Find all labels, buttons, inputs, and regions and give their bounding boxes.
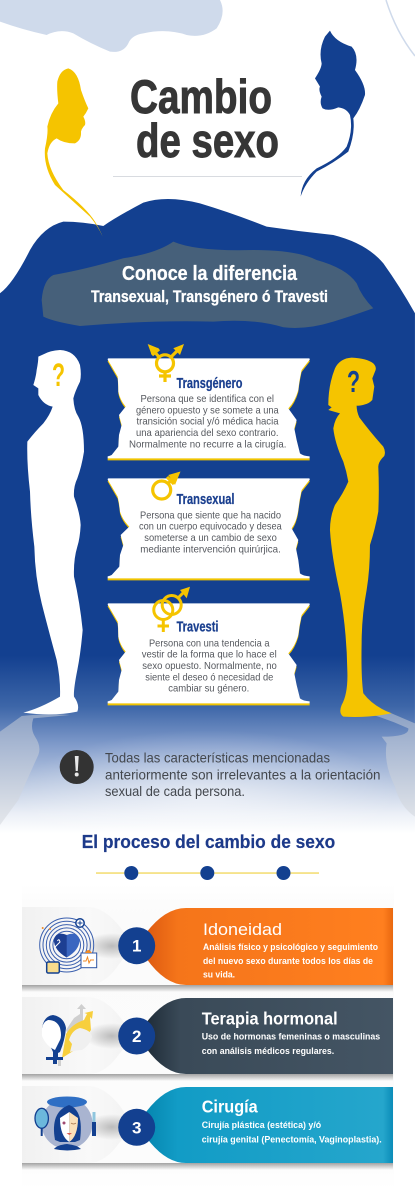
number badge: 3 (132, 1118, 141, 1137)
left tab (22, 907, 140, 985)
title: de sexo (136, 114, 279, 167)
description: una apariencia del sexo contrario. (136, 428, 278, 439)
card: Travesti (108, 587, 310, 705)
icon: face with mirror (35, 1096, 96, 1150)
woman silhouette: ? (347, 364, 360, 399)
card shape (108, 478, 310, 580)
heading: Travesti (176, 619, 218, 636)
card: Transexual (108, 472, 310, 580)
step 1: Idoneidad (22, 907, 393, 992)
step text (203, 920, 378, 981)
description (142, 638, 277, 695)
step text: Cirujía plástica (estética) y/ó (202, 1120, 321, 1131)
number badge: 2 (132, 1027, 141, 1046)
shadow (22, 1163, 393, 1170)
step text: Idoneidad (203, 920, 282, 939)
step text: Terapia hormonal (202, 1008, 338, 1028)
number badge (118, 1109, 155, 1146)
step text (202, 1097, 382, 1146)
alert note (105, 750, 380, 799)
colour bar (146, 908, 393, 985)
icon: blue face with ribbon (301, 31, 365, 197)
step text: cirujía genital (Penectomía, Vaginoplastia). (202, 1135, 382, 1146)
description: vestir de la forma que lo hace el (142, 650, 277, 661)
icon: transgender symbol (148, 344, 184, 382)
title (130, 70, 279, 167)
blue mountain background (0, 199, 415, 833)
description: Persona con una tendencia a (149, 638, 270, 649)
left tab (22, 1086, 140, 1163)
number badge (118, 927, 155, 964)
title divider (113, 176, 302, 177)
subtitle panel: Transexual, Transgénero ó Travesti (91, 288, 328, 306)
description: mediante intervención quirúrjica. (140, 544, 281, 555)
card shape (108, 603, 310, 705)
description: transición social y/ó médica hacia (136, 417, 279, 428)
alert note: anteriormente son irrelevantes a la orientación (105, 766, 380, 782)
description: someterse a un cambio de sexo (144, 533, 277, 544)
description (139, 510, 282, 555)
description: Persona que se identifica con el (140, 394, 274, 405)
step 2: Terapia hormonal (22, 997, 393, 1081)
step text: Análisis físico y psicológico y seguimiento (203, 942, 378, 953)
subtitle panel: Conoce la diferencia (122, 263, 298, 285)
description: cambiar su género. (168, 684, 249, 695)
man silhouette: ? (52, 357, 65, 393)
description: género opuesto y se somete a una (136, 405, 279, 416)
icon: male symbol (153, 472, 180, 499)
alert note: sexual de cada persona. (105, 783, 245, 799)
icon: male and female symbols (154, 587, 190, 632)
description: Normalmente no recurre a la cirugía. (129, 439, 286, 450)
left tab (22, 997, 140, 1074)
subtitle panel (42, 242, 373, 328)
timeline (96, 866, 319, 880)
step text: del nuevo sexo durante todos los días de (203, 956, 373, 967)
heading: Transgénero (176, 375, 242, 392)
man silhouette (23, 350, 84, 714)
step text: su vida. (203, 970, 235, 981)
woman silhouette (328, 358, 392, 717)
title: Cambio (130, 70, 272, 123)
process panel background (22, 885, 394, 1190)
shadow (22, 985, 393, 992)
description: con un cuerpo equivocado y desea (139, 522, 282, 533)
grey rocks (0, 713, 415, 825)
step text (202, 1008, 380, 1057)
step 3: Cirugía (22, 1086, 393, 1170)
number badge: 1 (132, 937, 141, 956)
colour bar (146, 998, 393, 1074)
alert note: Todas las características mencionadas (105, 750, 330, 766)
decorative cloud top (0, 0, 415, 56)
icon: heart and rings (40, 918, 97, 973)
step text: Cirugía (202, 1097, 258, 1117)
process heading: El proceso del cambio de sexo (82, 832, 335, 852)
icon: exclamation alert (60, 750, 94, 784)
shadow (22, 1074, 393, 1081)
description: sexo opuesto. Normalmente, no (142, 661, 277, 672)
number badge (118, 1018, 155, 1054)
central glow (17, 730, 397, 860)
heading: Transexual (176, 491, 234, 508)
step text: Uso de hormonas femeninas o masculinas (202, 1031, 380, 1042)
description: siente el deseo ó necesidad de (145, 672, 273, 683)
card shape (108, 358, 310, 460)
card: Transgénero (108, 344, 310, 460)
colour bar (146, 1087, 393, 1163)
icon: faces and gender arrows (42, 1004, 93, 1066)
step text: con análisis médicos regulares. (202, 1046, 334, 1057)
description: Persona que siente que ha nacido (140, 510, 281, 521)
description (129, 394, 286, 450)
icon: yellow face with ribbon (45, 68, 103, 237)
